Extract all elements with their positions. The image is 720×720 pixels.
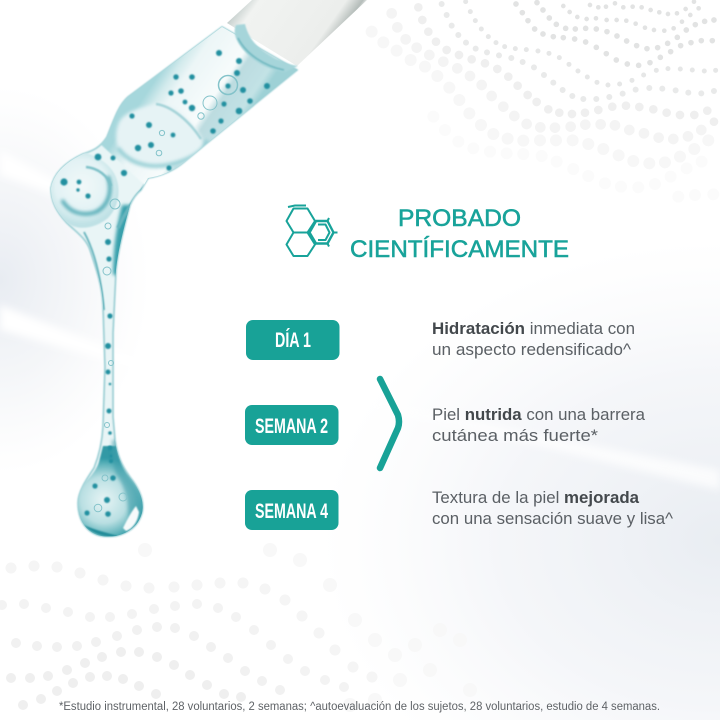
background dots: top right halftone: [372, 2, 716, 197]
text block: día 1: [432, 320, 635, 359]
text block: día 1: Hidratación inmediata con: [432, 320, 635, 338]
text block: semana 4: con una sensación suave y lisa^: [432, 510, 673, 528]
text block: semana 2: [432, 406, 646, 445]
drop highlight: [123, 506, 139, 531]
inner glass end: [116, 103, 204, 165]
badge: día 1: [246, 320, 340, 360]
badge: día 1: DÍA 1: [275, 329, 311, 352]
right dark edge of stream: [113, 205, 132, 275]
arrow: chevron: [380, 379, 399, 468]
badge: semana 4: [245, 490, 338, 530]
badge: semana 4: SEMANA 4: [255, 500, 328, 523]
bulb: [49, 152, 119, 228]
footnote: *Estudio instrumental, 28 voluntarios, 2 semanas; ^autoevaluación de los sujetos, 28 voluntarios, estudio de 4 semanas.: [59, 701, 660, 713]
glass tube: [227, 0, 367, 66]
air bubbles: [94, 76, 238, 512]
title: [350, 205, 569, 263]
drop: [78, 445, 143, 536]
liquid silhouette outline: [51, 27, 297, 537]
text block: semana 4: [432, 489, 673, 528]
text block: semana 2: Piel nutrida con una barrera: [432, 406, 646, 424]
collar ring: [235, 24, 298, 72]
badge: semana 2: [245, 405, 338, 445]
background dots: bottom left halftone: [2, 550, 470, 705]
dropper: [49, 0, 367, 541]
text block: semana 2: cutánea más fuerte*: [432, 427, 599, 445]
clipped liquid details: [49, 15, 305, 541]
badge: semana 2: SEMANA 2: [255, 415, 328, 438]
dropper chamber: [101, 27, 296, 185]
text block: día 1: un aspecto redensificado^: [432, 341, 631, 359]
text block: semana 4: Textura de la piel mejorada: [432, 489, 640, 507]
teal micro-spheres: [60, 50, 270, 517]
title: PROBADO: [398, 205, 521, 232]
icon: molecule hexagons: [286, 206, 338, 256]
title: CIENTÍFICAMENTE: [350, 236, 569, 263]
